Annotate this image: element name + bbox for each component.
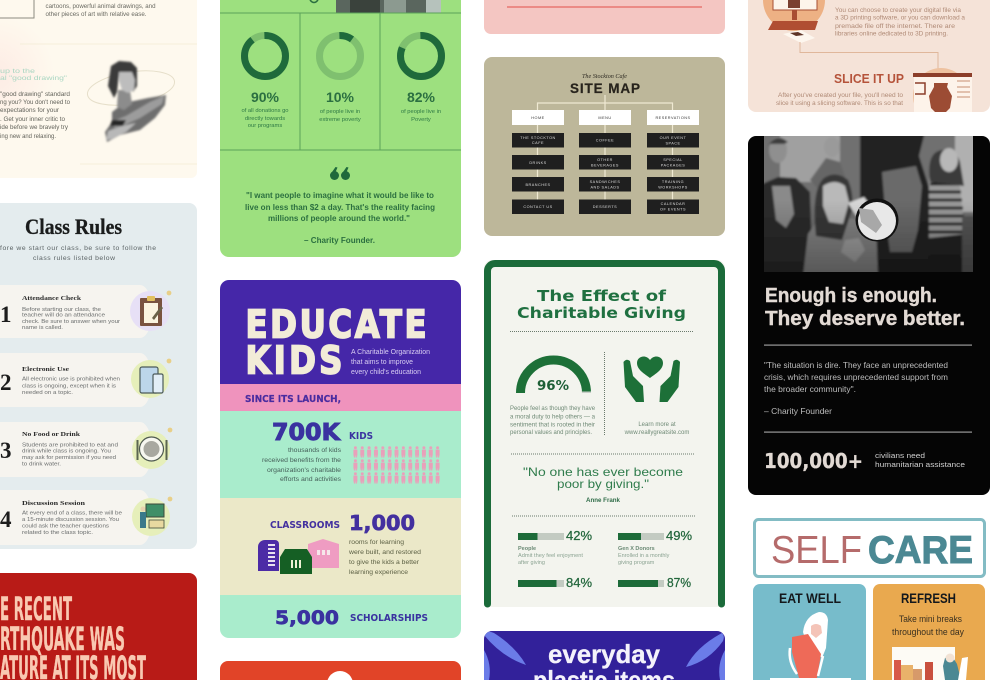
donut: 82% — [400, 36, 442, 76]
stat text: 90%: directly towards — [245, 116, 285, 122]
rule 4: could ask the teacher questions — [22, 524, 110, 530]
step text: You can choose to create your digital file via — [835, 7, 962, 14]
article text lines: cartoons, powerful animal drawings, and — [46, 3, 156, 10]
stat: 87%: 87% — [667, 576, 691, 590]
rule 4: At every end of a class, there will be — [22, 510, 122, 516]
panel: site map — [484, 57, 725, 236]
panel: charitable giving — [484, 260, 725, 607]
cafe name: The Stockton Cafe — [582, 73, 627, 80]
panel: orange-red card — [220, 661, 461, 680]
body text: ide before we bravely try — [0, 125, 68, 131]
subheading — [0, 68, 67, 82]
kids band: received benefits from the — [262, 457, 341, 464]
panel: educate kids — [220, 280, 461, 638]
kids band: thousands of kids — [288, 447, 342, 454]
heading: site map: SITE MAP — [570, 81, 640, 96]
leaf decorations — [484, 632, 725, 680]
stat text: 10%: extreme poverty — [319, 117, 361, 123]
headline: Enough is enough. — [765, 285, 937, 307]
column: home: BRANCHES — [525, 183, 551, 187]
dotted dividers — [510, 332, 695, 516]
gauge: 96% — [520, 360, 591, 394]
column: menu: DESSERTS — [593, 205, 617, 209]
icon: buildings — [258, 539, 339, 574]
headline — [533, 639, 675, 680]
icon: hands holding heart — [624, 356, 680, 402]
gauge description: a moral duty to help others — a — [510, 414, 596, 420]
headline: everyday — [548, 639, 661, 669]
pink band — [220, 384, 461, 411]
stat: 42%: People — [518, 546, 536, 552]
rule 2 — [0, 353, 171, 407]
card: refresh — [873, 584, 985, 680]
stat number: 100,000+ — [764, 449, 863, 473]
scholarships band: 5,000 — [275, 607, 339, 629]
classrooms band: learning experience — [349, 569, 408, 576]
slicing text — [776, 92, 904, 107]
column: reservations — [647, 110, 699, 214]
icon: desktop computer — [763, 0, 825, 43]
gauge description: sentiment that is rooted in their — [510, 422, 595, 428]
stat text: 82%: 82% — [407, 89, 436, 105]
header band: EDUCATE — [246, 303, 427, 347]
kids band: efforts and activities — [280, 476, 342, 483]
rule 2: 2 — [0, 370, 12, 395]
slicing text: After you've created your file, you'll need to — [778, 92, 904, 99]
panel: enough is enough — [748, 132, 990, 495]
card: refresh: Take mini breaks — [899, 614, 963, 624]
body text: ing new and relaxing. — [0, 134, 56, 140]
subheading: up to the — [0, 68, 36, 75]
donut: 90% — [244, 36, 286, 76]
stat text: 90%: 90% — [251, 89, 280, 105]
body text: expectations for your — [0, 108, 59, 114]
rule 4: related to the class topic. — [22, 530, 93, 536]
photo: protesters with megaphone — [760, 132, 976, 276]
stat: 87% — [618, 576, 691, 590]
classrooms band: to give the kids a better — [349, 559, 420, 566]
stat: 84%: 84% — [566, 576, 592, 590]
headline: E RECENT — [0, 590, 72, 628]
rule 3: No Food or Drink — [22, 431, 81, 438]
rule 1: Attendance Check — [22, 295, 82, 302]
icon: plate and cutlery — [132, 428, 172, 469]
scholarships band: SCHOLARSHIPS — [350, 613, 428, 624]
panel: pink card — [484, 0, 725, 34]
card: refresh: throughout the day — [892, 627, 965, 637]
header band: A Charitable Organization — [351, 349, 430, 356]
column: menu: MENU — [598, 116, 612, 120]
column: reservations: WORKSHOPS — [658, 186, 688, 190]
stat text: 10%: of people live in — [320, 109, 360, 115]
heading: Charitable Giving — [517, 304, 686, 322]
panel: plastic items — [484, 631, 725, 680]
column: menu: COFFEE — [596, 138, 614, 142]
rule 4 — [0, 490, 172, 545]
title frame: SELF — [771, 529, 862, 572]
green frame — [488, 264, 722, 604]
stat: 49%: 49% — [666, 529, 692, 543]
quote text: millions of people around the world." — [268, 213, 410, 223]
rule 1 — [0, 285, 171, 338]
donut: 10% — [320, 36, 360, 76]
column: reservations: TRAINING — [662, 180, 684, 184]
illustration: woman at table — [770, 612, 851, 680]
rule 4: 4 — [0, 507, 12, 532]
column: menu — [579, 110, 631, 214]
red rule — [507, 6, 702, 8]
rule 3: Students are prohibited to eat and — [22, 442, 118, 448]
quote: the broader community". — [764, 384, 856, 394]
kids band: organization's charitable — [267, 467, 341, 474]
stat label — [875, 451, 965, 469]
framed image corner — [0, 0, 34, 18]
card: eat well — [753, 584, 866, 680]
kids band: KIDS — [349, 431, 373, 442]
headline — [765, 285, 965, 330]
rule 1: name is called. — [22, 325, 63, 331]
quote — [523, 465, 683, 491]
rule 3: 3 — [0, 438, 12, 463]
stat: 49%: Gen X Donors — [618, 546, 655, 552]
website note — [624, 422, 689, 436]
website note: Learn more at — [638, 422, 676, 428]
stat label: civilians need — [875, 451, 925, 460]
step text: libraries online dedicated to 3D printing. — [835, 30, 948, 38]
quote: "No one has ever become — [523, 465, 683, 479]
quote text: live on less than $2 a day. That's the reality facing — [245, 202, 435, 212]
stat: 49% — [618, 529, 692, 566]
icon: slicing software window — [913, 68, 972, 112]
stat text: 90%: our programs — [248, 123, 282, 129]
classrooms band: rooms for learning — [349, 539, 404, 546]
heading descender — [310, 0, 318, 2]
heading: class rules: Class Rules — [25, 214, 122, 239]
scholarships band — [220, 595, 461, 638]
stat text: 82% — [401, 89, 441, 123]
column: reservations: OUR EVENT — [660, 136, 687, 140]
header band: KIDS — [246, 339, 342, 383]
column: reservations: RESERVATIONS — [655, 116, 691, 120]
panel: charity stats — [220, 0, 461, 257]
body text: "good drawing" standard — [0, 92, 70, 98]
connector arrow — [800, 42, 938, 70]
card: refresh: REFRESH — [901, 590, 956, 606]
rule 2: needed on a topic. — [22, 390, 73, 396]
column: menu: OTHER — [597, 158, 613, 162]
body text: ng you? You don't need to — [0, 100, 71, 106]
title frame — [754, 520, 984, 576]
grid lines — [220, 13, 461, 150]
icon: greek bust with ring — [85, 61, 177, 142]
body text: . Get your inner critic to — [0, 117, 66, 123]
rule 2: class is ongoing, except when it is — [22, 384, 117, 390]
intro text — [0, 245, 156, 262]
title frame: CARE — [868, 529, 973, 572]
stat text: 82%: of people live in — [401, 109, 441, 115]
column: home — [512, 110, 564, 214]
gauge description: People feel as though they have — [510, 406, 596, 412]
stat: 49%: Enrolled in a monthly — [618, 553, 670, 559]
subheading: al "good drawing" — [0, 75, 67, 82]
divider — [764, 432, 972, 433]
rule 3: drink while class is ongoing. You — [22, 448, 111, 454]
intro text: class rules listed below — [33, 255, 115, 262]
quote: "The situation is dire. They face an unprecedented — [764, 360, 948, 370]
column: home: CONTACT US — [523, 205, 553, 209]
panel: 3d printing guide — [748, 0, 990, 124]
panel: self care — [753, 520, 985, 680]
stat: 42% — [518, 529, 592, 566]
icon: white circle — [327, 671, 353, 680]
body text — [0, 92, 71, 140]
icon: clipboard — [130, 291, 171, 331]
stat text: 90% — [241, 89, 289, 129]
header band: every child's education — [351, 369, 421, 376]
column: reservations: OF EVENTS — [660, 208, 686, 212]
quote — [764, 360, 948, 416]
classrooms band: CLASSROOMS — [270, 520, 340, 531]
quote: crisis, which requires unprecedented support from — [764, 372, 948, 382]
divider — [764, 344, 972, 346]
card: eat well: EAT WELL — [779, 590, 841, 606]
step text: premade file off the internet. There are — [835, 23, 956, 30]
rule 1: check. Be sure to answer when your — [22, 319, 120, 325]
column: reservations: CALENDAR — [661, 202, 685, 206]
step text: a 3D printing software, or you can download a — [835, 14, 965, 22]
column: home: DRINKS — [529, 161, 547, 165]
rule 3: may ask for permission if you need — [22, 455, 116, 461]
intro text: fore we start our class, be sure to follow the — [0, 245, 156, 252]
stat text: 90%: of all donations go — [241, 108, 289, 114]
icon: devices — [131, 359, 171, 398]
column: home: HOME — [531, 116, 545, 120]
icon: teacher at board — [132, 497, 172, 536]
stat text: 10%: 10% — [326, 89, 355, 105]
column: reservations: PACKAGES — [661, 164, 685, 168]
photo strip — [336, 0, 441, 13]
attribution: – Charity Founder. — [304, 236, 375, 245]
column: home: CAFE — [532, 141, 544, 145]
panel: class rules — [0, 203, 197, 549]
step text — [835, 7, 965, 38]
article text lines: other pieces of art with relative ease. — [46, 11, 147, 18]
stat text: 82%: Poverty — [411, 117, 431, 123]
rule 1: teacher will do an attendance — [22, 312, 105, 318]
gauge description — [510, 406, 596, 436]
stat label: humanitarian assistance — [875, 460, 965, 469]
classrooms band: were built, and restored — [348, 549, 421, 556]
quote: poor by giving." — [557, 477, 649, 491]
quote author: Anne Frank — [586, 498, 621, 504]
icon: quotation mark — [330, 167, 350, 180]
stat: 42%: 42% — [566, 529, 592, 543]
stat: 49%: giving program — [618, 560, 655, 566]
connectors — [538, 95, 672, 205]
slicing text: slice it using a slicing software. This is so that — [776, 100, 903, 107]
dividers — [20, 44, 197, 164]
article text lines — [46, 3, 156, 18]
column: home: THE STOCKTON — [520, 136, 556, 140]
column: menu: SANDWICHES — [590, 180, 620, 184]
gauge: 96%: 96% — [537, 379, 569, 394]
column: reservations: SPACE — [665, 142, 681, 146]
gauge description: personal values and principles. — [510, 430, 592, 436]
rule 3: to drink water. — [22, 462, 61, 468]
quote: – Charity Founder — [764, 406, 832, 416]
illustration: person relaxing — [892, 647, 968, 680]
quote text: "I want people to imagine what it would be like to — [246, 190, 434, 200]
rule 2: All electronic use is prohibited when — [22, 376, 120, 382]
kids band — [220, 411, 461, 498]
rule 2: Electronic Use — [22, 366, 69, 373]
classrooms band: 1,000 — [349, 511, 415, 535]
stat: 42%: Admit they feel enjoyment — [518, 553, 583, 559]
column: reservations: SPECIAL — [663, 158, 683, 162]
rule 1: 1 — [0, 302, 12, 327]
column: menu: AND SALADS — [590, 186, 620, 190]
website note: www.reallygreatsite.com — [624, 430, 689, 436]
classrooms band — [220, 498, 461, 595]
stat: 42%: after giving — [518, 560, 545, 566]
headline — [0, 590, 146, 680]
kids band: 700K — [272, 420, 341, 446]
column: menu: BEVERAGES — [591, 164, 619, 168]
quote text — [245, 190, 435, 223]
header band: that aims to improve — [351, 359, 413, 366]
heading — [517, 287, 686, 322]
stat text: 10% — [319, 89, 361, 123]
panel: earthquake — [0, 573, 197, 680]
heading: slice it up: SLICE IT UP — [834, 71, 904, 86]
headline: RTHQUAKE WAS — [0, 620, 125, 658]
pictogram of kids — [352, 446, 441, 485]
panel: drawing article — [0, 0, 197, 178]
rule 4: a 15-minute discussion session. You — [22, 517, 119, 523]
rule 1: Before starting our class, the — [22, 307, 101, 313]
stat: 84% — [518, 576, 592, 590]
rule 4: Discussion Session — [22, 500, 86, 507]
headline: They deserve better. — [765, 308, 965, 330]
pink band: SINCE ITS LAUNCH, — [245, 394, 341, 405]
heading: The Effect of — [537, 287, 667, 305]
rule 3 — [0, 422, 172, 477]
header band — [220, 280, 461, 384]
